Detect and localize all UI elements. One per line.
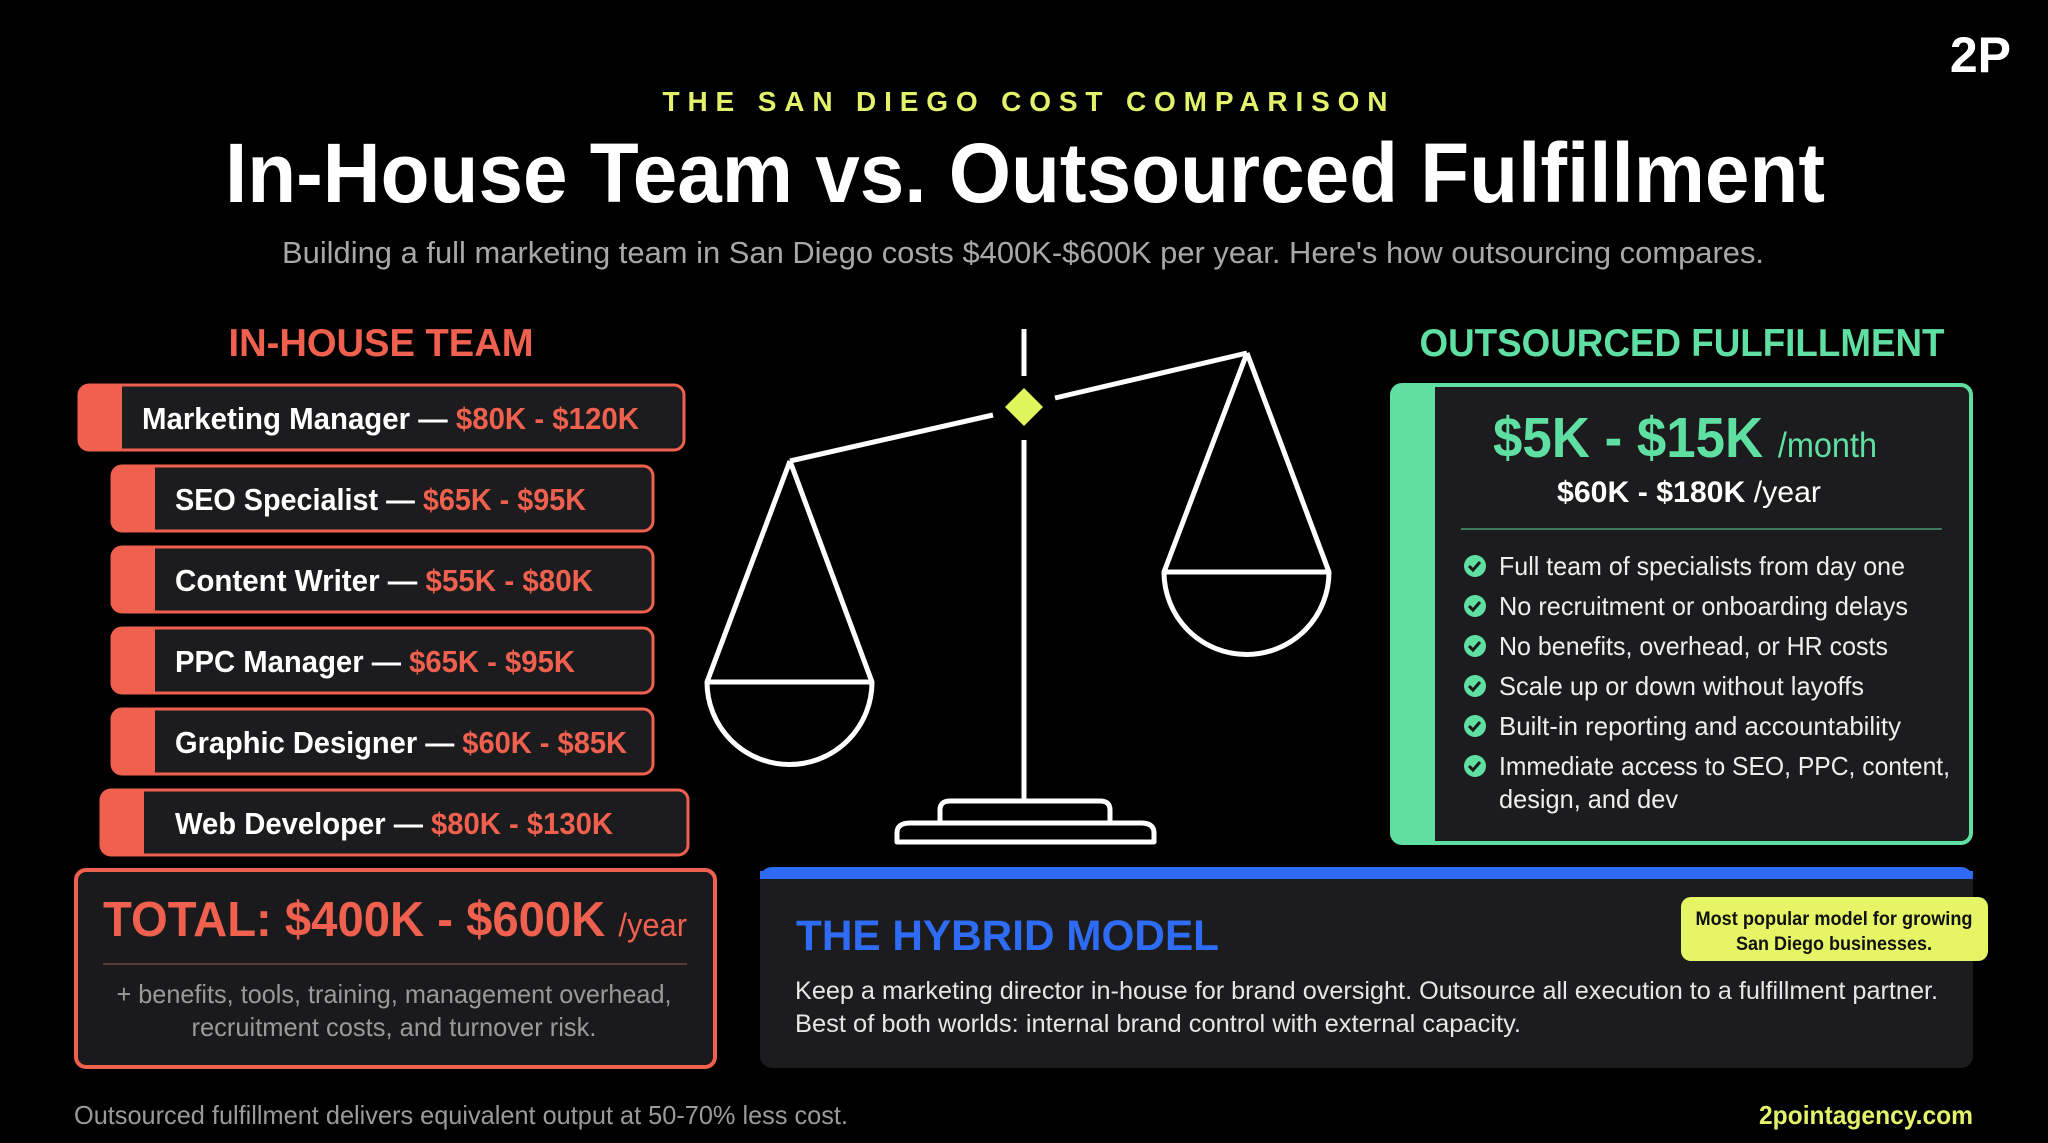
badge: most popular: Most popular model for growing xyxy=(1696,909,1972,930)
hybrid description: Keep a marketing director in-house for brand oversight. Outsource all execution to a fulfillment partner. xyxy=(795,977,1938,1005)
role: marketing manager xyxy=(79,385,684,450)
role: ppc manager: PPC Manager — $65K - $95K xyxy=(175,644,576,679)
panel: outsourced fulfillment xyxy=(1392,385,1971,843)
role: web developer: Web Developer — $80K - $130K xyxy=(175,806,614,841)
heading: outsourced fulfillment: OUTSOURCED FULFILLMENT xyxy=(1420,322,1945,365)
yearly price: $60K - $180K /year xyxy=(1557,476,1821,509)
hybrid heading: THE HYBRID MODEL xyxy=(796,912,1219,960)
role: graphic designer xyxy=(112,709,653,774)
badge: most popular: San Diego businesses. xyxy=(1736,934,1932,955)
panel: hybrid model: Best of both worlds: internal brand control with external capacity. xyxy=(795,1010,1521,1038)
benefits list: design, and dev xyxy=(1499,784,1678,814)
eyebrow heading: THE SAN DIEGO COST COMPARISON xyxy=(662,86,1388,117)
total note: + benefits, tools, training, management overhead, xyxy=(116,979,672,1009)
badge: most popular xyxy=(1681,897,1988,961)
role: content writer: Content Writer — $55K - $80K xyxy=(175,563,594,598)
role: ppc manager xyxy=(112,628,653,693)
benefits list: No benefits, overhead, or HR costs xyxy=(1499,631,1888,661)
panel: in-house total xyxy=(76,870,715,1067)
footer url: 2pointagency.com xyxy=(1759,1100,1973,1130)
logo: 2P: 2P xyxy=(1950,27,2011,83)
title: In-House Team vs. Outsourced Fulfillment xyxy=(225,126,1825,220)
panel: hybrid model xyxy=(760,867,1988,1068)
role: marketing manager: Marketing Manager — $80K - $120K xyxy=(142,401,640,436)
subtitle: Building a full marketing team in San Diego costs $400K-$600K per year. Here's how outsourcing compares. xyxy=(282,235,1764,270)
footer note: Outsourced fulfillment delivers equivalent output at 50-70% less cost. xyxy=(74,1100,848,1130)
panel: in-house roles xyxy=(79,385,688,855)
benefits list: Immediate access to SEO, PPC, content, xyxy=(1499,751,1950,781)
total amount: TOTAL: $400K - $600K /year xyxy=(103,893,687,947)
benefits list: Full team of specialists from day one xyxy=(1499,551,1905,581)
panel: in-house total: recruitment costs, and turnover risk. xyxy=(192,1012,596,1042)
icon: balance scale xyxy=(707,329,1329,842)
role: web developer xyxy=(101,790,688,855)
benefits list xyxy=(1464,551,1950,814)
benefits list: No recruitment or onboarding delays xyxy=(1499,591,1908,621)
role: graphic designer: Graphic Designer — $60K - $85K xyxy=(175,725,628,760)
benefits list: Built-in reporting and accountability xyxy=(1499,711,1901,741)
role: seo specialist xyxy=(112,466,653,531)
heading: in-house team: IN-HOUSE TEAM xyxy=(228,322,534,365)
monthly price: $5K - $15K /month xyxy=(1493,406,1877,470)
benefits list: Scale up or down without layoffs xyxy=(1499,671,1864,701)
role: seo specialist: SEO Specialist — $65K - $95K xyxy=(175,482,587,517)
role: content writer xyxy=(112,547,653,612)
